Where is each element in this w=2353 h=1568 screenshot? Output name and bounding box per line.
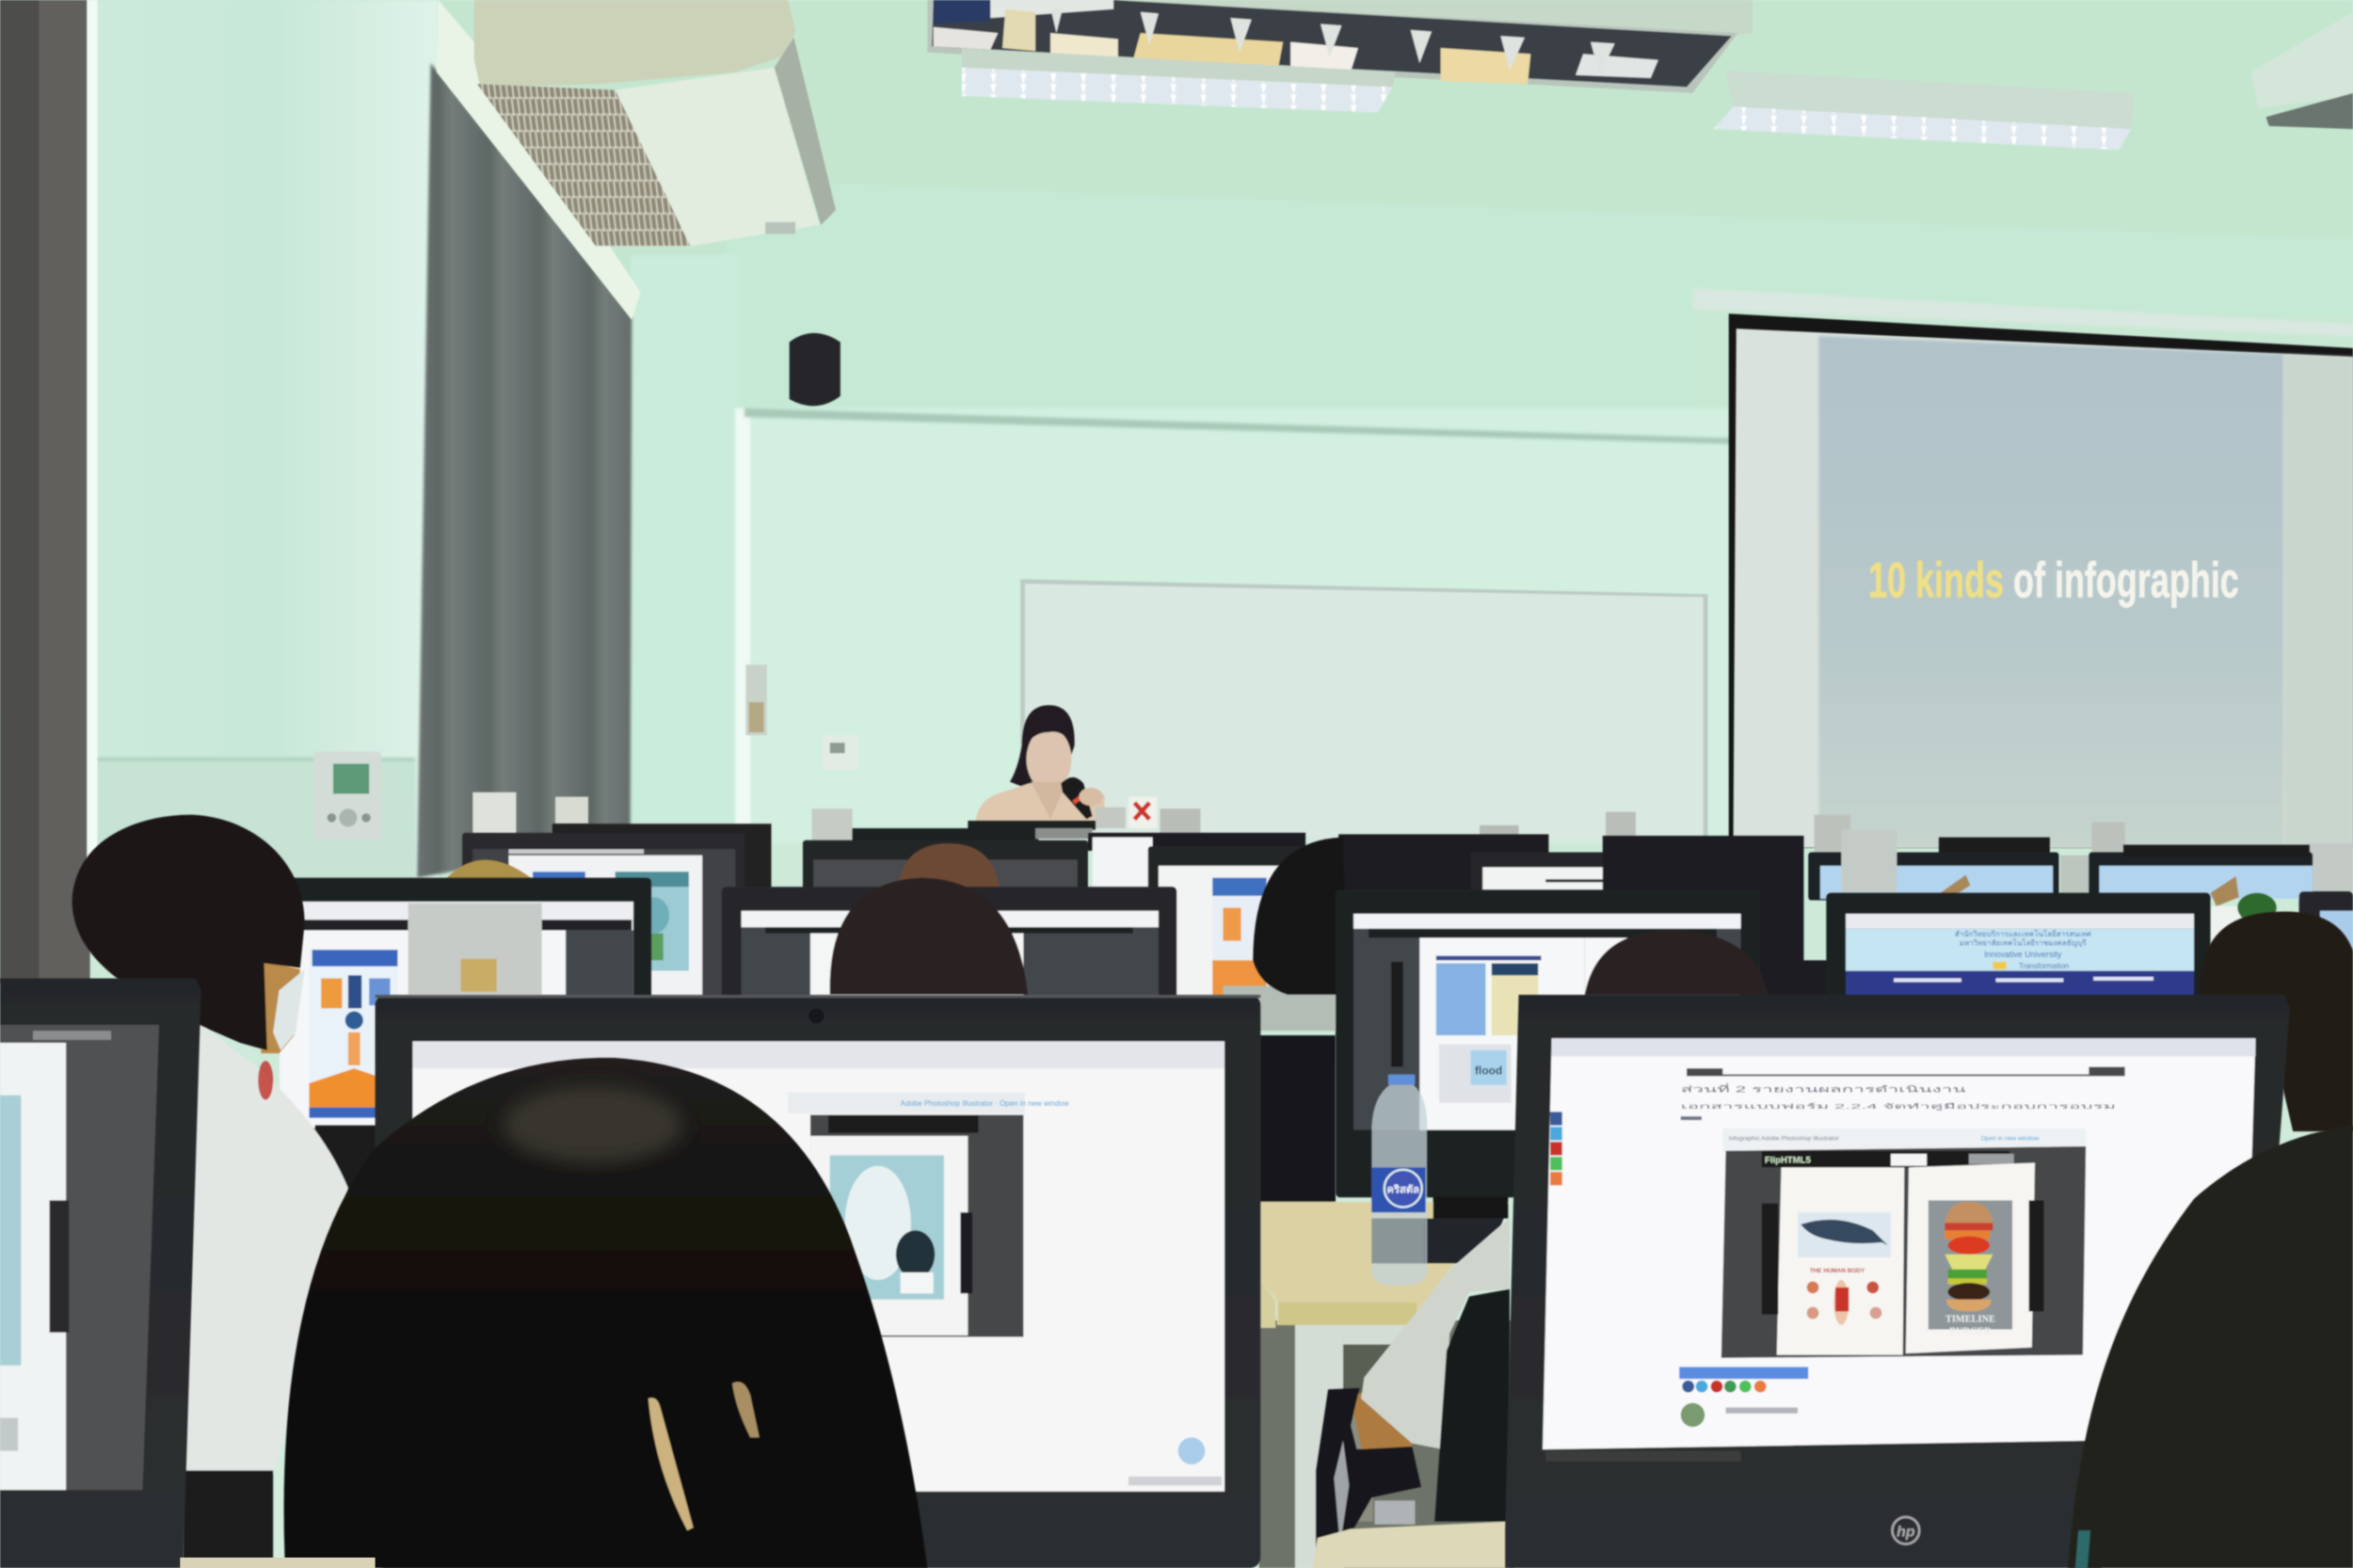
ceiling lights (927, 0, 2353, 150)
air conditioner (474, 0, 836, 246)
embedded flipbook viewer: Open in new window (1981, 1136, 2039, 1143)
desk name cards on the back row (472, 792, 2353, 894)
HP logo (1893, 1517, 1919, 1544)
left dark column (0, 0, 98, 983)
embedded flipbook viewer (1721, 1128, 2086, 1358)
foreground desk edge (180, 1558, 376, 1568)
water bottle (1371, 1074, 1427, 1286)
presenter (975, 705, 1104, 823)
pillar (78, 0, 439, 893)
embedded flipbook viewer: BURGER (1949, 1326, 1992, 1336)
desk with keyboard and bottle (1259, 1035, 1514, 1568)
middle monitor with student head: flood (1475, 1064, 1502, 1077)
page heading lines: ส่วนที่ 2 รายงานผลการดำเนินงาน (1681, 1083, 1967, 1096)
projected title: 10 kinds of infographic (1868, 553, 2239, 609)
HP logo: hp (1897, 1525, 1915, 1541)
student with mask (72, 815, 391, 1560)
student head, back right (2200, 912, 2353, 1131)
embedded flipbook viewer: TIMELINE (1945, 1315, 1995, 1325)
foreground monitor centre (376, 995, 1260, 1568)
page heading lines: เอกสารแบบฟอร์ม 2.2.4 จัดทำคู่มือประกอบการอบรม (1681, 1102, 2117, 1111)
embedded flipbook viewer: Infographic Adobe Photoshop Illustrator (1729, 1136, 1840, 1143)
wall speaker (790, 333, 840, 406)
thermostat panel (313, 752, 381, 840)
foreground monitor centre: Adobe Photoshop Illustrator · Open in new window (901, 1099, 1069, 1108)
foreground student head (284, 1058, 927, 1568)
curtain rail and lace trim (437, 0, 641, 320)
middle monitor right: Transformation (2019, 962, 2069, 970)
middle monitor left (280, 878, 651, 1136)
seated student and chair (1313, 1219, 1510, 1568)
foreground monitor left (0, 978, 201, 1568)
embedded flipbook viewer: THE HUMAN BODY (1810, 1268, 1865, 1274)
social sidebar icons (1550, 1112, 1562, 1185)
middle monitor with student head (1223, 838, 1768, 1197)
middle monitor centre (722, 878, 1176, 1000)
highlighted link and share icons (1679, 1367, 1808, 1427)
wall switches (745, 664, 858, 770)
foreground monitor right (1505, 995, 2290, 1568)
foreground student head, right (2068, 1126, 2353, 1568)
curtain (417, 63, 632, 878)
projection screen (1729, 313, 2353, 848)
water bottle: คริสตัล (1387, 1183, 1419, 1195)
middle monitor right: มหาวิทยาลัยเทคโนโลยีราชมงคลธัญบุรี (1960, 937, 2087, 947)
middle monitor right: Innovative University (1984, 950, 2062, 959)
back row monitors (462, 821, 2353, 1000)
page heading lines (1681, 1067, 2125, 1120)
embedded flipbook viewer: FlipHTML5 (1765, 1156, 1811, 1166)
back row student heads (446, 843, 1000, 888)
middle monitor right (1826, 893, 2211, 1005)
middle monitor right: สำนักวิทยบริการและเทคโนโลยีสารสนเทศ (1955, 929, 2091, 938)
whiteboard (1020, 579, 1707, 840)
